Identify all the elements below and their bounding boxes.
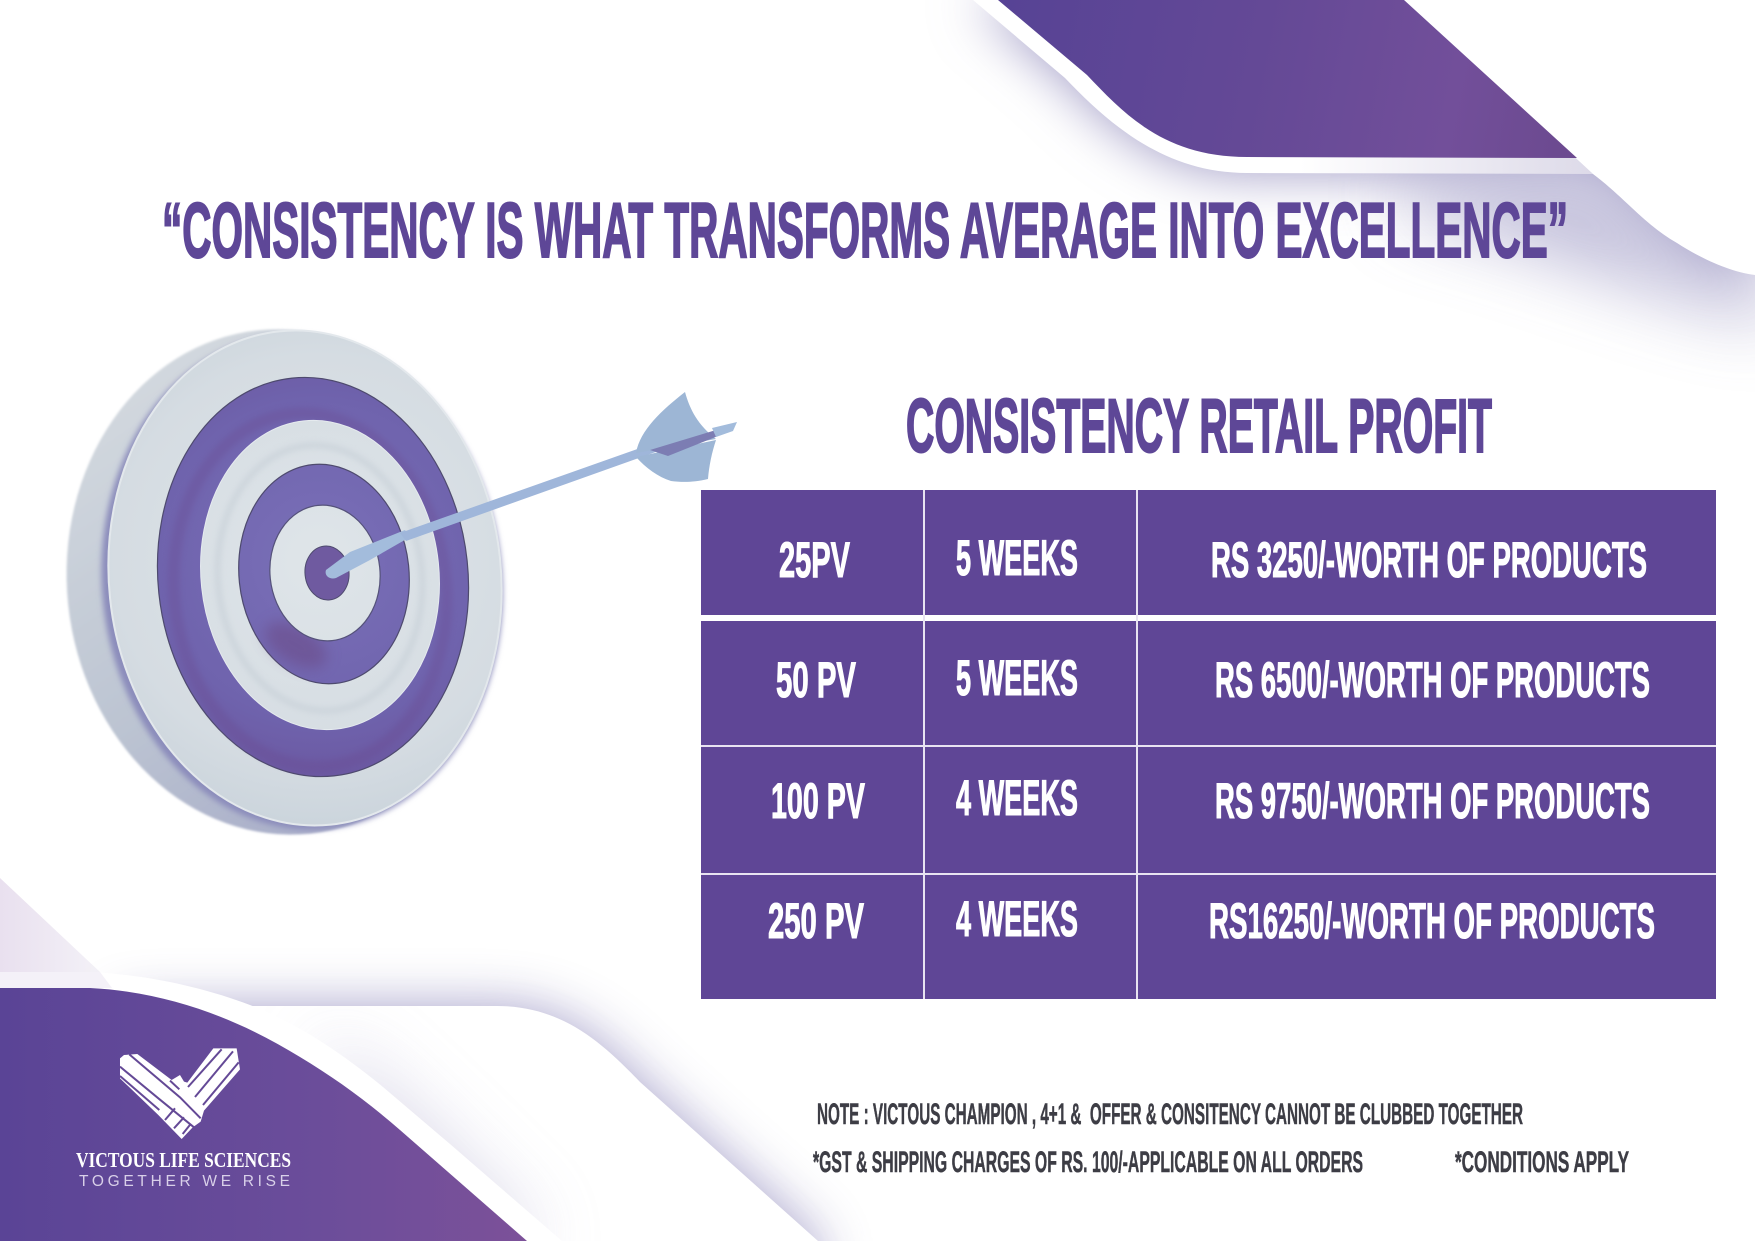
arrow upper fin bbox=[636, 392, 716, 453]
inner white ring bbox=[263, 500, 387, 646]
bottom white wave bbox=[0, 1006, 818, 1241]
bottom left band tint bbox=[0, 972, 112, 988]
row: 100 PV: 4 WEEKS bbox=[956, 770, 1078, 826]
row: 50 PV: 5 WEEKS bbox=[956, 650, 1078, 706]
icon silhouette bbox=[120, 1048, 240, 1139]
row divider one bbox=[701, 615, 1716, 621]
brand logo bbox=[76, 1048, 291, 1190]
board rear shadow bbox=[77, 314, 527, 850]
board face bbox=[84, 311, 526, 845]
brand tagline: TOGETHER WE RISE bbox=[79, 1173, 290, 1190]
bottom left purple shape bbox=[0, 988, 527, 1241]
brand name: VICTOUS LIFE SCIENCES bbox=[76, 1148, 291, 1172]
row divider two bbox=[701, 745, 1716, 747]
outer ring shading bbox=[156, 400, 464, 780]
outer purple ring bbox=[138, 362, 488, 792]
inner ring shading bbox=[258, 612, 334, 678]
row: 25 PV: 5 WEEKS bbox=[956, 530, 1078, 586]
top right white corner bbox=[1404, 0, 1755, 275]
row: 250 PV: 4 WEEKS bbox=[956, 891, 1078, 947]
row: 50 PV: 50 PV bbox=[776, 652, 856, 708]
target board with arrow bbox=[42, 308, 737, 856]
bottom left triangle bbox=[0, 878, 100, 972]
bottom white band bbox=[0, 972, 562, 1241]
row: 50 PV bbox=[776, 650, 1650, 708]
arrow head shaft bbox=[326, 530, 410, 579]
row: 250 PV bbox=[768, 891, 1655, 949]
row: 25 PV bbox=[779, 530, 1647, 588]
board back edge bbox=[42, 308, 526, 856]
column divider two bbox=[1136, 490, 1138, 999]
conditions note: *CONDITIONS APPLY bbox=[1455, 1146, 1629, 1179]
white ring ripple bbox=[205, 435, 435, 721]
outer white ring bbox=[185, 408, 455, 742]
arrow tail bbox=[712, 422, 737, 437]
arrow lower fin bbox=[636, 440, 716, 482]
arrow centre vane bbox=[650, 430, 718, 456]
inner purple ring bbox=[228, 456, 420, 692]
icon stripes bbox=[120, 1049, 239, 1134]
row: 100 PV bbox=[771, 770, 1650, 829]
icon: heart handshake bbox=[120, 1048, 240, 1139]
top right white band bbox=[973, 0, 1593, 174]
table background bbox=[701, 490, 1716, 999]
arrow shaft bbox=[400, 441, 664, 541]
row: 100 PV: 100 PV bbox=[771, 773, 865, 829]
bottom wave shadow bbox=[120, 1006, 818, 1241]
bullseye bbox=[302, 544, 352, 602]
arrow bbox=[326, 392, 737, 579]
top right purple shape bbox=[998, 0, 1577, 158]
top right wave shadow bbox=[973, 0, 1755, 320]
row divider three bbox=[701, 873, 1716, 875]
profit table bbox=[701, 490, 1716, 999]
row: 250 PV: 250 PV bbox=[768, 893, 864, 949]
footnotes bbox=[813, 1098, 1629, 1179]
bottom inner shadow bbox=[336, 1046, 540, 1222]
column divider one bbox=[923, 490, 925, 999]
row: 25 PV: 25PV bbox=[779, 532, 850, 588]
